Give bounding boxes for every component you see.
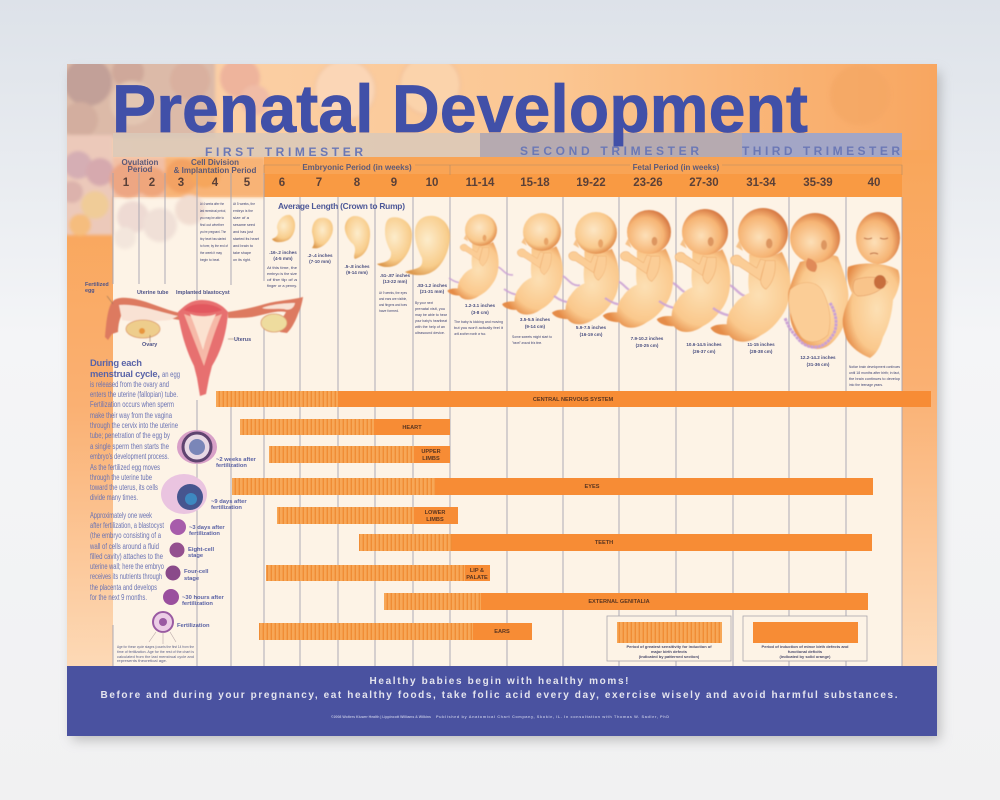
bar: upper limbs: UPPER bbox=[421, 449, 441, 455]
cell stage labels: stage bbox=[184, 576, 200, 582]
explanatory text: through the cervix into the uterine bbox=[90, 421, 178, 430]
explanatory text: toward the uterus, its cells bbox=[90, 483, 158, 492]
size and note captions: (7-10 mm) bbox=[309, 259, 331, 264]
notes weeks 4 and 5: on its right. bbox=[233, 257, 251, 262]
size and note captions: with the help of an bbox=[415, 324, 445, 329]
embryo: week 9 bbox=[377, 217, 412, 267]
explanatory text: Fertilization occurs when sperm bbox=[90, 400, 174, 409]
left ovary bbox=[126, 320, 160, 338]
anatomy labels: Fertilized bbox=[85, 282, 109, 288]
notes weeks 4 and 5: and has just bbox=[233, 229, 254, 234]
explanatory text: (the embryo consisting of a bbox=[90, 531, 161, 540]
size and note captions: .83-1.2 inches bbox=[417, 283, 448, 288]
size and note captions: .16-.2 inches bbox=[269, 250, 297, 255]
notes weeks 4 and 5: sesame seed bbox=[233, 222, 255, 227]
explanatory text: During each bbox=[90, 357, 142, 368]
size and note captions: finger or a penny. bbox=[267, 283, 297, 288]
explanatory text: menstrual cycle, bbox=[90, 368, 160, 379]
legend: solid: Period of induction of minor birth defects and bbox=[762, 644, 849, 649]
bar: upper limbs: LIMBS bbox=[422, 456, 440, 462]
explanatory text: Approximately one week bbox=[90, 511, 153, 520]
embryo: week 7 bbox=[312, 218, 333, 248]
week numbers: 6 bbox=[279, 177, 285, 189]
bar: lower limbs: LIMBS bbox=[426, 517, 444, 523]
second trimester band bbox=[480, 133, 742, 157]
explanatory text: make their way from the vagina bbox=[90, 411, 172, 420]
size and note captions bbox=[267, 250, 900, 387]
age footnote: represents theoretical age. bbox=[117, 659, 167, 663]
notes weeks 4 and 5: you may be able to bbox=[200, 215, 224, 220]
size and note captions: into the teenage years. bbox=[849, 382, 883, 387]
notes weeks 4 and 5: find out whether bbox=[200, 222, 225, 227]
explanatory text: enters the uterine (fallopian) tube. bbox=[90, 390, 178, 399]
explanatory text bbox=[89, 357, 180, 602]
legend: solid: functional deficits bbox=[788, 649, 823, 654]
explanatory text: for the next 9 months. bbox=[90, 593, 147, 602]
week numbers: 10 bbox=[426, 177, 438, 189]
bar: central nervous system: CENTRAL NERVOUS SYSTEM bbox=[533, 397, 613, 403]
header orange band bbox=[264, 157, 902, 174]
size and note captions: and fingers and toes bbox=[379, 302, 407, 307]
fetus: weeks 19-22 bbox=[552, 212, 638, 324]
footer credits: ©2008 Wolters Kluwer Health | Lippincott Williams & Wilkins bbox=[331, 715, 431, 719]
bar: upper limbs bbox=[269, 446, 450, 463]
size and note captions: At 9 weeks, the eyes bbox=[379, 290, 407, 295]
week numbers: 31-34 bbox=[746, 177, 776, 189]
fetus: weeks 11-14 bbox=[447, 214, 513, 300]
notes weeks 4 and 5: take shape bbox=[233, 250, 251, 255]
fetus: weeks 27-30 bbox=[657, 209, 751, 332]
notes weeks 4 and 5 bbox=[200, 201, 260, 262]
week numbers: 9 bbox=[391, 177, 397, 189]
size and note captions: embryo is the size bbox=[267, 271, 297, 276]
age footnote bbox=[117, 645, 194, 663]
notes weeks 4 and 5: At 5 weeks, the bbox=[233, 201, 255, 206]
anatomy labels: Ovary bbox=[142, 342, 157, 348]
embryo: week 6 bbox=[272, 215, 295, 242]
cell: eight-cell bbox=[170, 542, 184, 558]
anatomy labels: Uterine tube bbox=[137, 290, 168, 296]
bar: eyes bbox=[232, 478, 873, 495]
cell stage labels bbox=[177, 457, 257, 629]
notes weeks 4 and 5: embryo is the bbox=[233, 208, 253, 213]
week numbers: 3 bbox=[178, 177, 184, 189]
legend: patterned: major birth defects bbox=[651, 649, 688, 654]
bar: external genitalia: EXTERNAL GENITALIA bbox=[588, 599, 650, 605]
right ovary bbox=[261, 314, 287, 332]
size and note captions: and ears are visible, bbox=[379, 296, 407, 301]
size and note captions: 11-15 inches bbox=[747, 342, 775, 347]
bar: lower limbs: LOWER bbox=[425, 510, 445, 516]
age footnote: calculated from the last menstrual cycle and bbox=[117, 655, 194, 659]
legend: patterned bbox=[607, 616, 731, 661]
week numbers: 1 bbox=[123, 177, 130, 189]
bar: heart: HEART bbox=[402, 425, 422, 431]
week numbers: 40 bbox=[868, 177, 880, 189]
size and note captions: (13-22 mm) bbox=[383, 279, 408, 284]
period headings: Fetal Period (in weeks) bbox=[633, 163, 720, 172]
size and note captions: (21-31 mm) bbox=[420, 289, 445, 294]
cell stage labels: Four-cell bbox=[184, 569, 209, 575]
week numbers: 35-39 bbox=[803, 177, 833, 189]
size and note captions: prenatal visit, you bbox=[415, 306, 445, 311]
anatomy labels: egg bbox=[85, 288, 95, 294]
size and note captions: your baby's heartbeat bbox=[415, 318, 448, 323]
embryo: week 8 bbox=[345, 216, 370, 259]
notes weeks 4 and 5: to form; by the end of bbox=[200, 243, 229, 248]
explanatory text: the placenta and develops bbox=[90, 583, 157, 592]
cell background artwork bbox=[67, 64, 460, 248]
explanatory text: uterine wall; here the embryo bbox=[90, 562, 164, 571]
bar: ears: EARS bbox=[494, 629, 510, 635]
cell stage labels: Eight-cell bbox=[188, 547, 214, 553]
age footnote: Age for these cycle stages (counts the first 14 from the bbox=[117, 645, 194, 649]
explanatory text: divide many times. bbox=[90, 493, 138, 502]
trimester headings: FIRST TRIMESTER bbox=[205, 145, 363, 159]
period headings: & Implantation Period bbox=[174, 166, 256, 175]
size and note captions: have formed. bbox=[379, 308, 399, 313]
explanatory text: through the uterine tube bbox=[90, 473, 152, 482]
fetus: weeks 15-18 bbox=[502, 213, 580, 315]
size and note captions: (16-19 cm) bbox=[580, 332, 603, 337]
bar: teeth bbox=[359, 534, 872, 551]
size and note captions: the brain continues to develop bbox=[849, 376, 900, 381]
notes weeks 4 and 5: tiny heart has started bbox=[200, 236, 226, 241]
left panel base bbox=[113, 197, 264, 666]
anatomy labels: Implanted blastocyst bbox=[176, 290, 230, 296]
top backdrop bbox=[67, 64, 937, 204]
side bands bbox=[67, 150, 937, 666]
bar: central nervous system bbox=[216, 391, 931, 407]
size and note captions: .2-.4 inches bbox=[307, 253, 333, 258]
fetus: weeks 23-26 bbox=[603, 210, 693, 328]
cell stage labels: Fertilization bbox=[177, 623, 210, 629]
main cream panel bbox=[264, 197, 902, 666]
size and note captions: (31-36 cm) bbox=[807, 362, 830, 367]
footer banner bbox=[67, 666, 937, 736]
size and note captions: By your next bbox=[415, 300, 434, 305]
size and note captions: (3-8 cm) bbox=[471, 310, 489, 315]
explanatory text: filled cavity) attaches to the bbox=[90, 552, 163, 561]
week numbers: 2 bbox=[149, 177, 155, 189]
cell: two weeks bbox=[177, 430, 217, 464]
period headings: Embryonic Period (in weeks) bbox=[302, 163, 412, 172]
legend: solid bbox=[743, 616, 867, 661]
size and note captions: (20-25 cm) bbox=[636, 343, 659, 348]
cell: nine days bbox=[161, 474, 207, 514]
early stage cell diagrams bbox=[149, 430, 217, 644]
poster shadow bbox=[72, 72, 940, 740]
explanatory text: tube; penetration of the egg by bbox=[90, 431, 170, 440]
week numbers: 8 bbox=[354, 177, 361, 189]
period headings: Period bbox=[128, 165, 153, 174]
fetus: weeks 35-39 bbox=[785, 213, 848, 349]
week numbers: 11-14 bbox=[466, 177, 495, 189]
period headings: Ovulation bbox=[122, 158, 159, 167]
development bars bbox=[216, 391, 931, 640]
period headings bbox=[122, 158, 902, 175]
notes weeks 4 and 5: the week it may bbox=[200, 250, 222, 255]
cell stage labels: fertilization bbox=[216, 463, 247, 469]
size and note captions: (28-38 cm) bbox=[750, 349, 773, 354]
trimester headings bbox=[205, 144, 900, 159]
bar: lower limbs bbox=[277, 507, 458, 524]
explanatory text: a single sperm then starts the bbox=[90, 442, 169, 451]
size and note captions: At this time, the bbox=[267, 265, 297, 270]
anatomy labels: Uterus bbox=[234, 337, 251, 343]
week numbers: 23-26 bbox=[633, 177, 663, 189]
size and note captions: 12.2-14.2 inches bbox=[800, 355, 836, 360]
bar: external genitalia bbox=[384, 593, 868, 610]
size and note captions: ultrasound device. bbox=[415, 330, 445, 335]
size and note captions: (9-14 mm) bbox=[346, 270, 368, 275]
bar: eyes: EYES bbox=[585, 484, 600, 490]
size and note captions: "travel" around this time. bbox=[512, 340, 542, 345]
size and note captions: .5-.8 inches bbox=[344, 264, 370, 269]
notes weeks 4 and 5: you're pregnant. The bbox=[200, 229, 226, 234]
week header cells bbox=[264, 174, 902, 197]
size and note captions: .51-.87 inches bbox=[380, 273, 411, 278]
size and note captions: 1.2-3.1 inches bbox=[465, 303, 496, 308]
fetus: week 40 bbox=[843, 212, 900, 358]
week numbers: 15-18 bbox=[520, 177, 550, 189]
left tube bbox=[105, 298, 180, 340]
size and note captions: 7.9-10.2 inches bbox=[631, 336, 664, 341]
bar: lip and palate: PALATE bbox=[466, 575, 488, 581]
legend: solid: (indicated by solid orange) bbox=[780, 654, 831, 659]
legend: patterned: Period of greatest sensitivity for induction of bbox=[626, 644, 712, 649]
title: Prenatal Development bbox=[112, 71, 808, 147]
cell: four-cell bbox=[166, 566, 180, 580]
notes weeks 4 and 5: last menstrual period, bbox=[200, 208, 226, 213]
size and note captions: 3.5-5.5 inches bbox=[520, 317, 551, 322]
average length heading: Average Length (Crown to Rump) bbox=[278, 201, 405, 211]
first trimester band bbox=[113, 133, 480, 157]
size and note captions: 5.9-7.5 inches bbox=[576, 325, 607, 330]
size and note captions: of the tip of a bbox=[267, 277, 298, 282]
cell: fertilization bbox=[149, 612, 176, 644]
poster bbox=[60, 55, 937, 666]
week numbers bbox=[123, 177, 880, 189]
size and note captions: may be able to hear bbox=[415, 312, 448, 317]
age footnote: time of fertilization. Age for the rest of the chart is bbox=[117, 650, 194, 654]
bar: lip and palate bbox=[266, 565, 490, 581]
cell stage labels: ~2 weeks after bbox=[216, 457, 257, 463]
explanatory text: embryo's development process. bbox=[90, 452, 169, 461]
explanatory text: receives its nutrients through bbox=[90, 572, 162, 581]
cell stage labels: fertilization bbox=[182, 601, 213, 607]
explanatory text: As the fertilized egg moves bbox=[90, 463, 160, 472]
right tube bbox=[228, 297, 303, 333]
anatomy labels bbox=[85, 282, 251, 348]
week numbers: 5 bbox=[244, 177, 251, 189]
third trimester band bbox=[742, 133, 902, 157]
bar: teeth: TEETH bbox=[595, 540, 613, 546]
explanatory text: after fertilization, a blastocyst bbox=[90, 521, 165, 530]
fetuses bbox=[447, 208, 900, 358]
size and note captions: Some sweets might start to bbox=[512, 334, 552, 339]
notes weeks 4 and 5: started its heart bbox=[233, 236, 260, 241]
week numbers: 7 bbox=[316, 177, 322, 189]
footer banner: Published by Anatomical Chart Company, Skokie, IL. In consultation with Thomas W. Sadler, PhD bbox=[436, 714, 669, 719]
embryo: week 10 bbox=[405, 216, 450, 275]
size and note captions: 10.6-14.5 inches bbox=[686, 342, 722, 347]
size and note captions: The baby is kicking and moving bbox=[454, 319, 503, 324]
explanatory text: wall of cells around a fluid bbox=[89, 542, 159, 551]
uterus body bbox=[178, 300, 228, 396]
uterus diagram bbox=[105, 296, 303, 396]
cell: three days bbox=[170, 519, 186, 535]
size and note captions: (4-5 mm) bbox=[273, 256, 293, 261]
bar: lip and palate: LIP & bbox=[470, 568, 484, 574]
embryos weeks 6-10 bbox=[272, 215, 450, 275]
notes weeks 4 and 5: begin to beat. bbox=[200, 257, 220, 262]
cell stage labels: ~9 days after bbox=[211, 499, 247, 505]
footer message: Before and during your pregnancy, eat healthy foods, take folic acid every day, exercise wisely and avoid harmful substances. bbox=[100, 690, 898, 701]
size and note captions: until 18 months after birth; in fact, bbox=[849, 370, 900, 375]
legend: patterned: (indicated by patterned section) bbox=[639, 654, 700, 659]
fetus: weeks 31-34 bbox=[710, 208, 813, 342]
week numbers: 27-30 bbox=[689, 177, 719, 189]
week numbers: 4 bbox=[212, 177, 219, 189]
cell stage labels: stage bbox=[188, 553, 204, 559]
cell stage labels: fertilization bbox=[211, 505, 242, 511]
notes weeks 4 and 5: At 4 weeks after the bbox=[200, 201, 224, 206]
week numbers: 19-22 bbox=[576, 177, 606, 189]
size and note captions: until another month or two. bbox=[454, 331, 486, 336]
explanatory text: is released from the ovary and bbox=[90, 380, 169, 389]
trimester headings: THIRD TRIMESTER bbox=[742, 144, 900, 158]
cell stage labels: ~30 hours after bbox=[182, 595, 224, 601]
bar: ears bbox=[259, 623, 532, 640]
bar: heart bbox=[240, 419, 450, 435]
period headings: Cell Division bbox=[191, 158, 239, 167]
cell: thirty hours bbox=[163, 589, 179, 605]
size and note captions: but you won't actually feel it bbox=[454, 325, 504, 330]
size and note captions: (9-14 cm) bbox=[525, 324, 546, 329]
trimester headings: SECOND TRIMESTER bbox=[520, 144, 699, 158]
notes weeks 4 and 5: and brain to bbox=[233, 243, 253, 248]
notes weeks 4 and 5: size of a bbox=[233, 215, 250, 220]
cell stage labels: ~3 days after bbox=[189, 525, 225, 531]
cell stage labels: fertilization bbox=[189, 531, 220, 537]
size and note captions: (26-37 cm) bbox=[693, 349, 716, 354]
size and note captions: Notice brain development continues bbox=[849, 364, 900, 369]
explanatory text: an egg bbox=[162, 370, 180, 379]
footer headline: Healthy babies begin with healthy moms! bbox=[370, 676, 628, 687]
